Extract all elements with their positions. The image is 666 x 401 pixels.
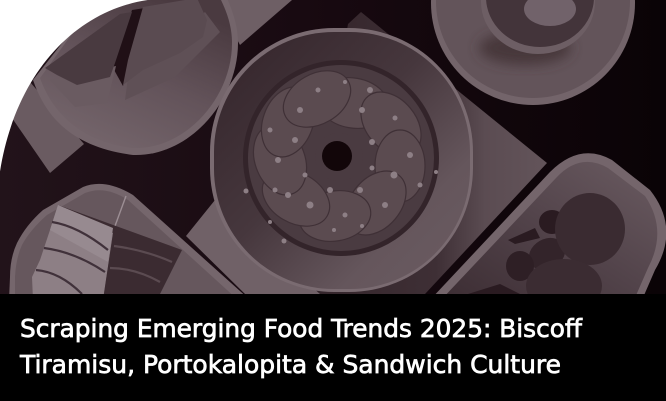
vegetables (468, 210, 571, 294)
plate: sandwich top left (33, 0, 238, 155)
plate: patties bottom right (436, 153, 666, 294)
toothpick (115, 196, 126, 226)
caption band (0, 294, 666, 401)
left bread (45, 12, 132, 85)
sandwich light side (32, 210, 113, 294)
patty: lower (526, 259, 602, 294)
right bread (123, 0, 207, 85)
white corner cut-out (0, 0, 156, 178)
plate: layered sandwich bottom left (9, 184, 250, 300)
title: Scraping Emerging Food Trends 2025: Biscoff (20, 314, 583, 343)
dark gap between bread halves (113, 8, 145, 86)
plate: tiramisu top right (431, 0, 635, 105)
left bread filling (113, 66, 116, 72)
napkin: under centre bowl (186, 12, 547, 294)
tart base (248, 65, 434, 251)
photo: overhead food table (0, 0, 666, 313)
tiramisu cake (481, 0, 595, 54)
title (19, 314, 583, 379)
table background (0, 0, 666, 294)
cocoa dusting (479, 31, 571, 65)
right bread filling (125, 12, 220, 100)
nut crumbs (244, 80, 438, 244)
title: Tiramisu, Portokalopita & Sandwich Culture (19, 350, 561, 379)
tart centre hole (322, 141, 352, 171)
cake topping (524, 0, 576, 26)
patty: upper (555, 193, 625, 265)
sandwich dark side (58, 205, 182, 300)
napkin: top left (12, 0, 292, 173)
sandwich layers (36, 222, 172, 294)
tart slices (253, 70, 426, 242)
bowl: centre tart (210, 28, 473, 292)
